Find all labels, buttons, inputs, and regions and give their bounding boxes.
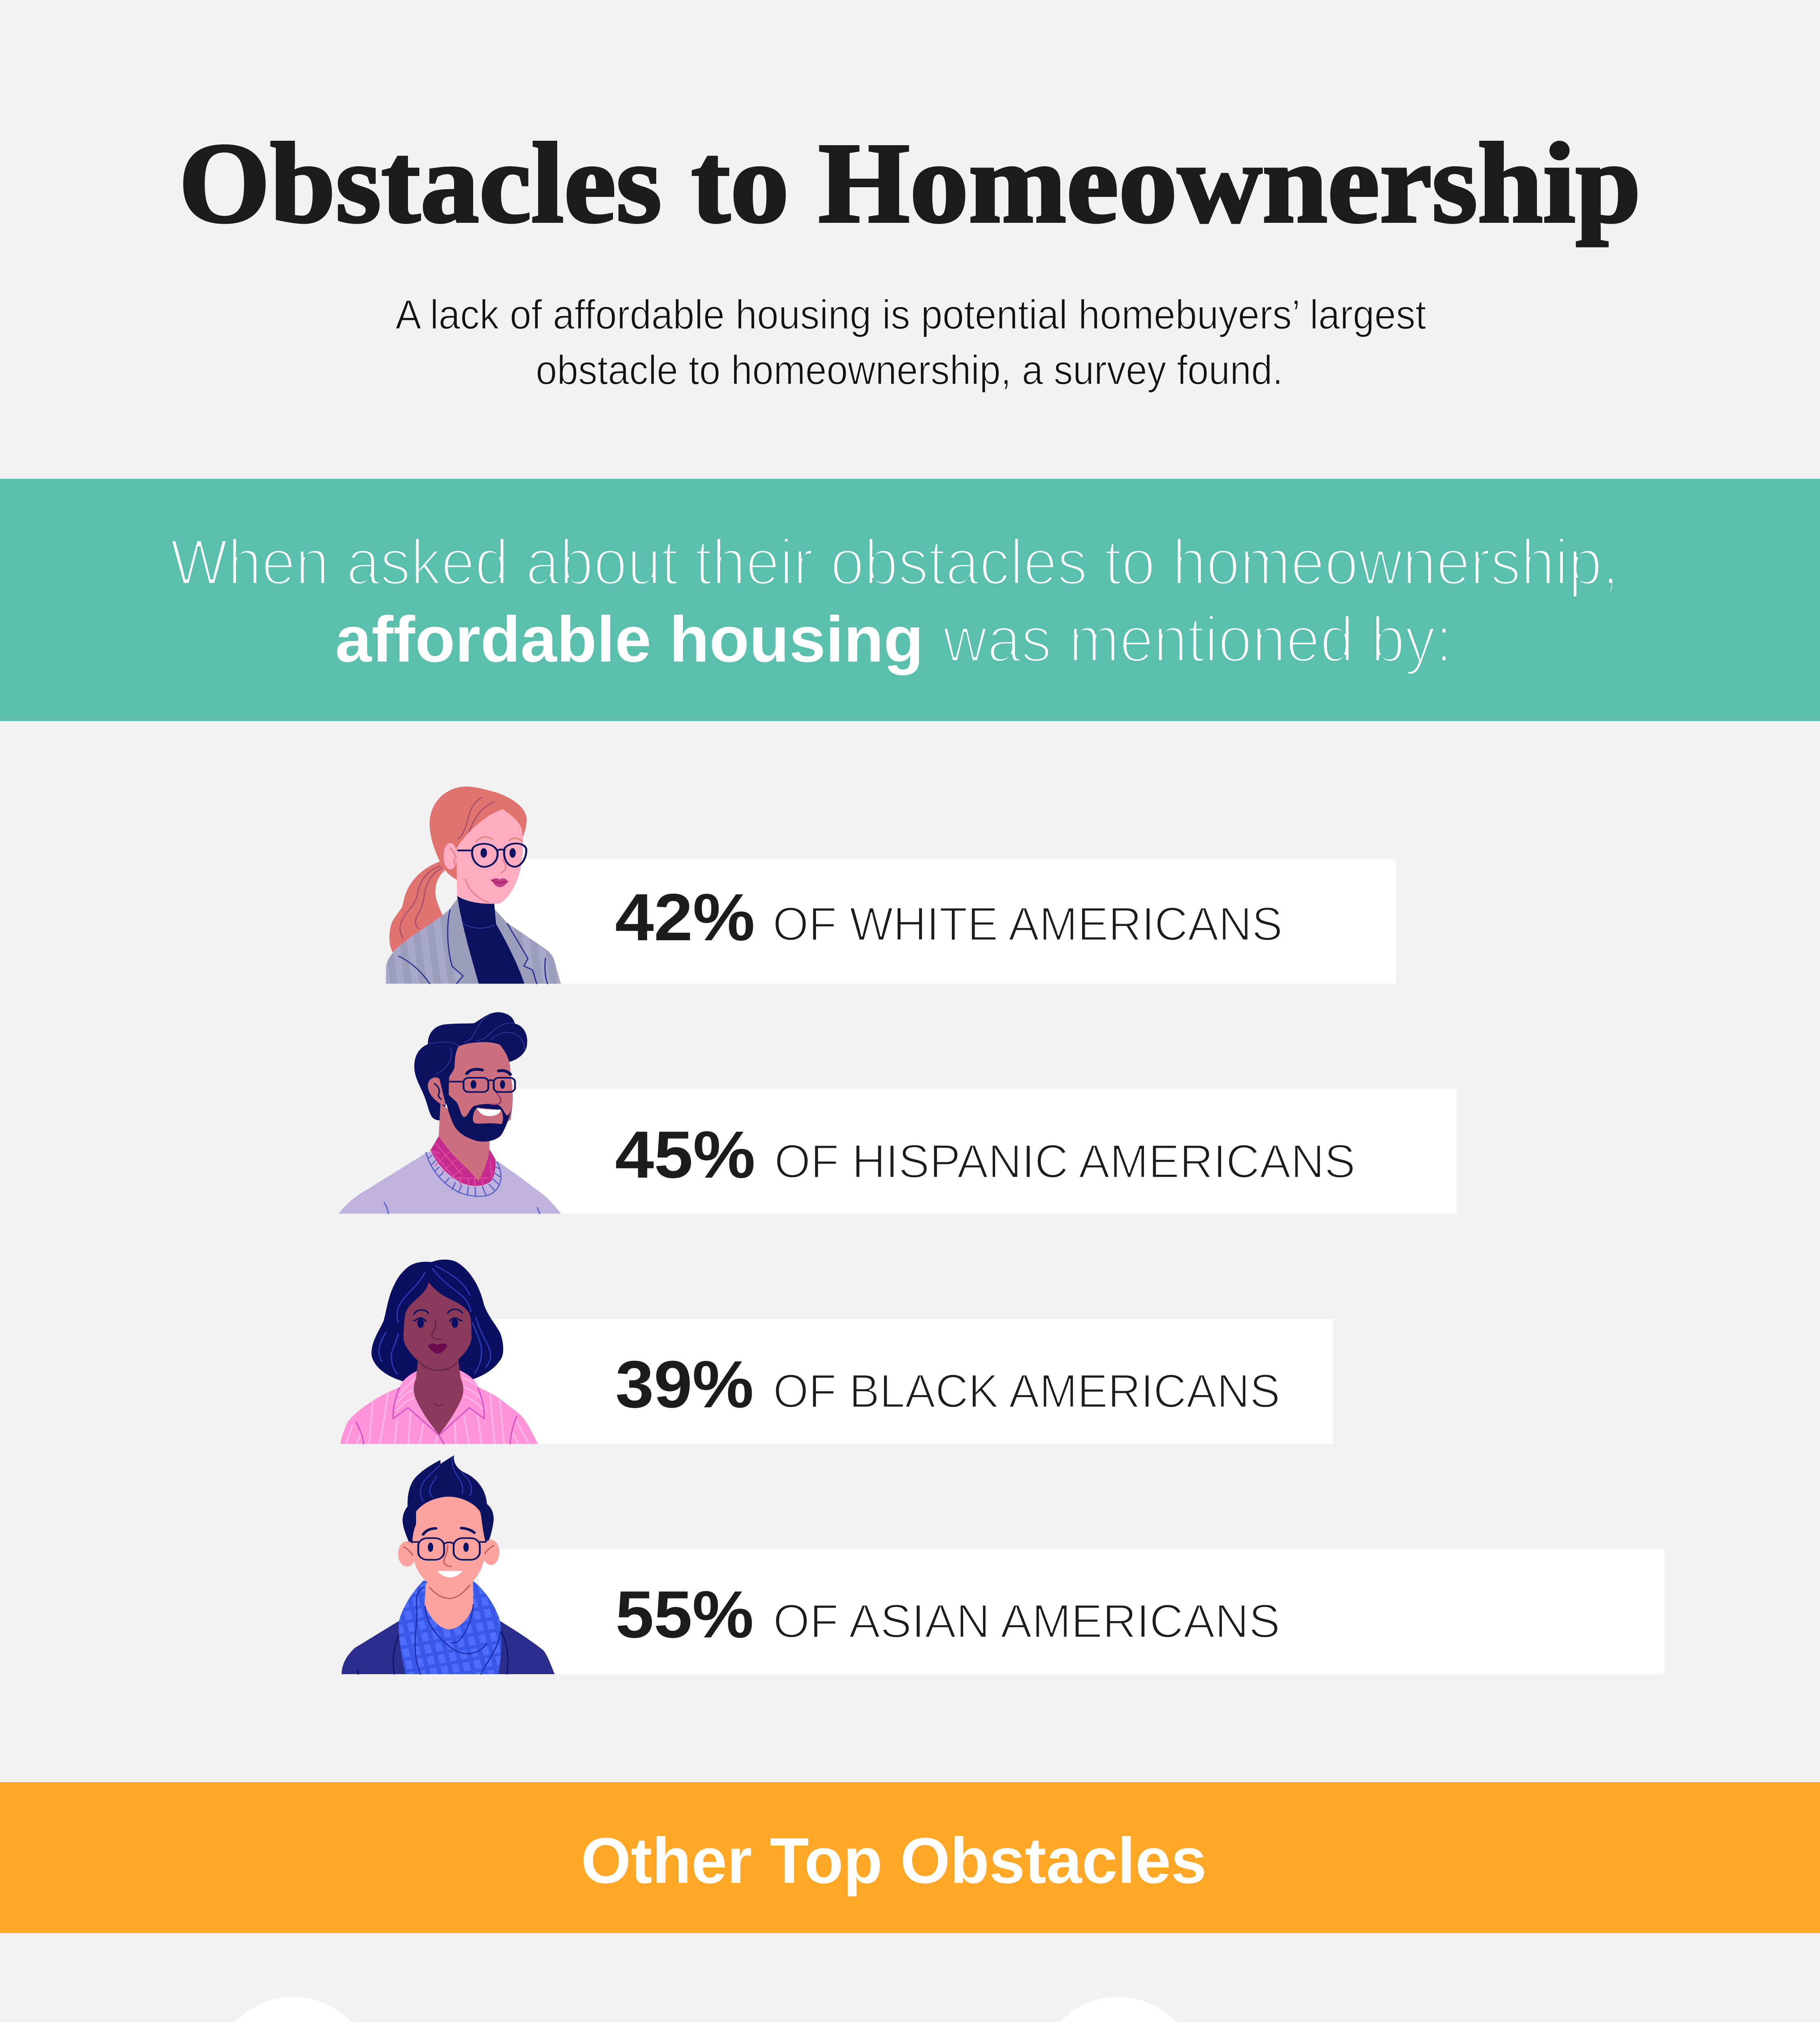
banner text: When asked about their obstacles to homeownership, — [170, 526, 1619, 598]
bar: white americans — [479, 859, 1396, 984]
item: houses that fit criteria — [213, 1997, 785, 2022]
bar: black americans — [479, 1319, 1333, 1444]
bar: white americans: OF WHITE AMERICANS — [773, 897, 1283, 950]
orange banner — [0, 1782, 1820, 1933]
portrait: woman with ponytail — [386, 787, 561, 984]
banner text — [170, 526, 1619, 675]
teal banner — [0, 479, 1820, 721]
orange banner: Other Top Obstacles — [581, 1824, 1207, 1897]
subtitle: A lack of affordable housing is potential homebuyers’ largest — [395, 292, 1426, 338]
bar: asian americans: OF ASIAN AMERICANS — [773, 1595, 1280, 1648]
title: Obstacles to Homeownership — [179, 120, 1641, 247]
bar: hispanic americans: OF HISPANIC AMERICANS — [774, 1135, 1355, 1188]
bar: black americans: OF BLACK AMERICANS — [773, 1364, 1280, 1417]
bar: hispanic americans — [479, 1089, 1456, 1214]
banner text: was mentioned by: — [943, 603, 1452, 675]
bar: black americans: 39% — [615, 1347, 754, 1421]
bar: hispanic americans: 45% — [615, 1117, 755, 1192]
subtitle: obstacle to homeownership, a survey found. — [536, 347, 1283, 393]
bar: asian americans: 55% — [615, 1577, 754, 1652]
portrait: bearded man — [338, 1012, 561, 1214]
subtitle — [395, 292, 1426, 393]
bar: white americans: 42% — [615, 880, 755, 954]
bar: asian americans — [479, 1549, 1664, 1674]
item: lack of credit — [1038, 1997, 1565, 2022]
banner text: affordable housing — [335, 603, 924, 675]
portrait: woman with dark bob — [340, 1260, 538, 1444]
portrait: man with scarf — [342, 1455, 555, 1674]
